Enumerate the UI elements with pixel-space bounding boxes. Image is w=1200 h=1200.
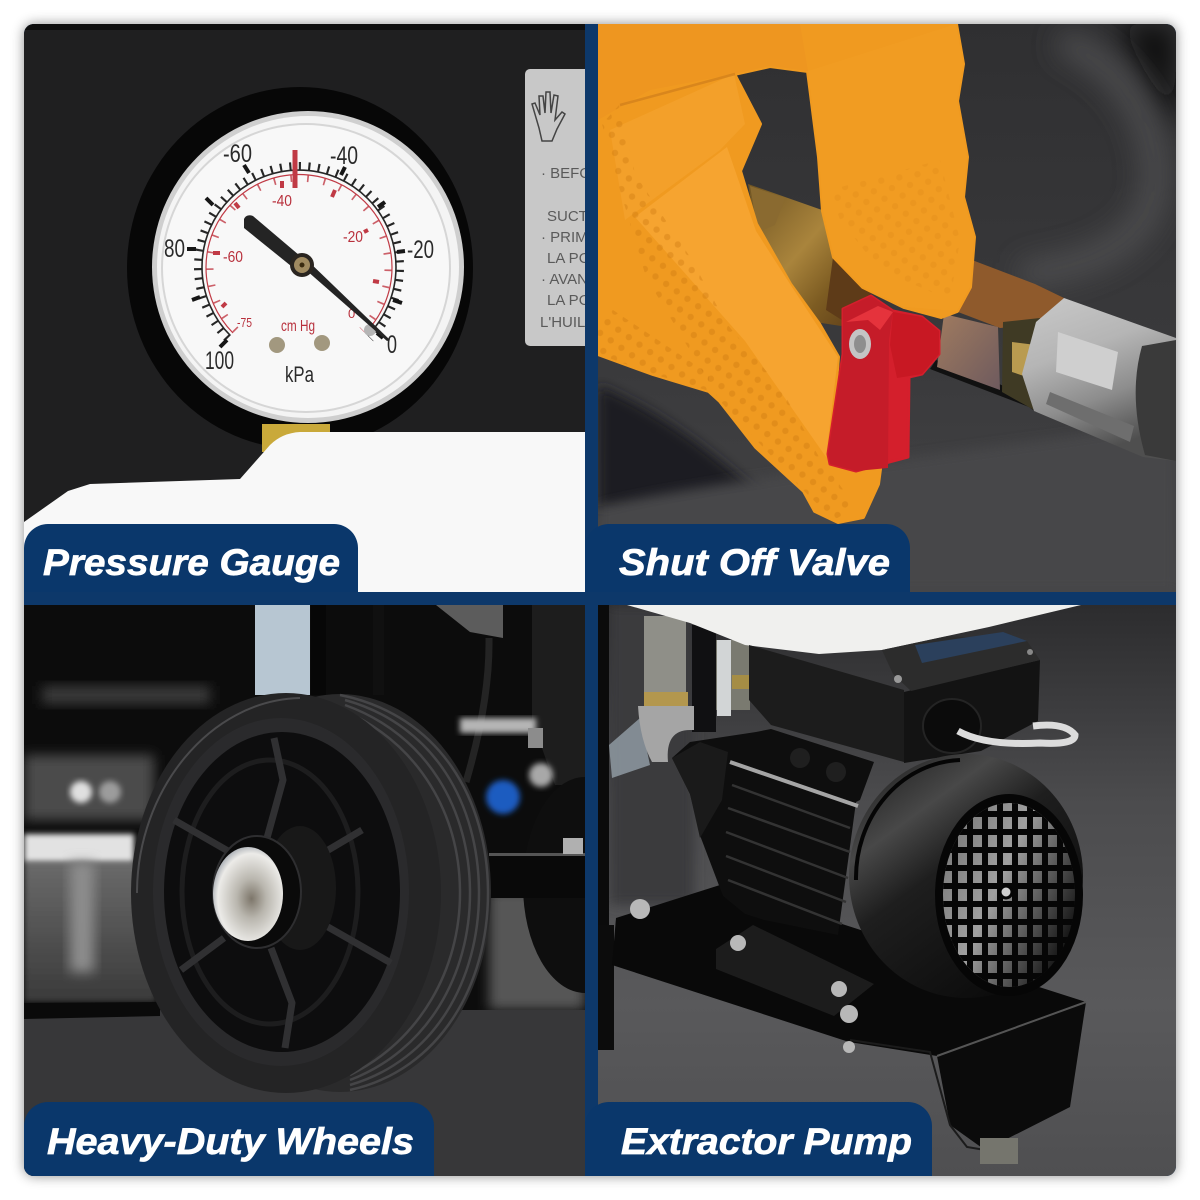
sight glass and elbow [638,616,752,762]
screws [269,337,285,353]
warning label: · AVAN [541,271,588,288]
glove grip texture [602,104,856,520]
panel: pressure gauge [24,24,595,592]
panel: heavy-duty wheels [24,605,647,1176]
label: heavy-duty wheels: Heavy-Duty Wheels [47,1121,414,1162]
label: extractor pump [585,1102,932,1176]
cmHg scale numbers: -75 [237,315,252,330]
black scale [187,165,405,347]
white tank [627,605,1081,654]
panel: extractor pump [598,605,1176,1176]
cmHg scale numbers: cm Hg [281,318,315,335]
warning label: L'HUIL [540,314,585,331]
gauge recess [127,87,473,449]
label: heavy-duty wheels [24,1102,434,1176]
motor end bell [849,754,1083,998]
kPa scale numbers: -20 [407,236,434,264]
terminal box [749,632,1075,763]
label: shut off valve: Shut Off Valve [619,542,890,583]
kPa scale numbers: 0 [387,331,397,359]
warning label [525,69,585,346]
red valve handle [828,296,939,471]
red scale [206,150,392,333]
valve body [748,184,1176,461]
needle [244,215,390,341]
label: extractor pump: Extractor Pump [621,1121,912,1162]
kPa scale numbers: kPa [285,362,315,387]
kPa scale numbers: -60 [223,140,252,168]
panel: shut off valve [598,24,1176,592]
kPa scale numbers: -40 [330,142,358,170]
cmHg scale numbers [223,193,363,335]
warning label: SUCT [547,208,588,225]
warning label: LA PO [547,250,590,267]
label: shut off valve [585,524,910,592]
cmHg scale numbers: -40 [272,193,292,210]
kPa scale numbers [164,140,434,387]
cmHg scale numbers: -60 [223,249,243,266]
label: pressure gauge: Pressure Gauge [43,542,340,583]
motor body [672,729,1083,998]
warning label: LA PO [547,292,590,309]
wheel [131,693,491,1093]
warning label: · PRIM [541,229,588,246]
kPa scale numbers: 80 [164,235,185,263]
cable gland and cable [923,699,981,753]
pump base plate [612,885,1086,1164]
kPa scale numbers: 100 [205,347,234,375]
warning label: · BEFO [541,165,591,182]
bolts [630,899,858,1053]
orange glove [598,24,974,522]
cmHg scale numbers: 0 [348,306,355,321]
fan grille [935,794,1083,996]
label: pressure gauge [24,524,358,592]
gauge dial [152,111,464,423]
hub spokes [174,738,391,1048]
cmHg scale numbers: -20 [343,229,363,246]
white tank [24,432,585,592]
